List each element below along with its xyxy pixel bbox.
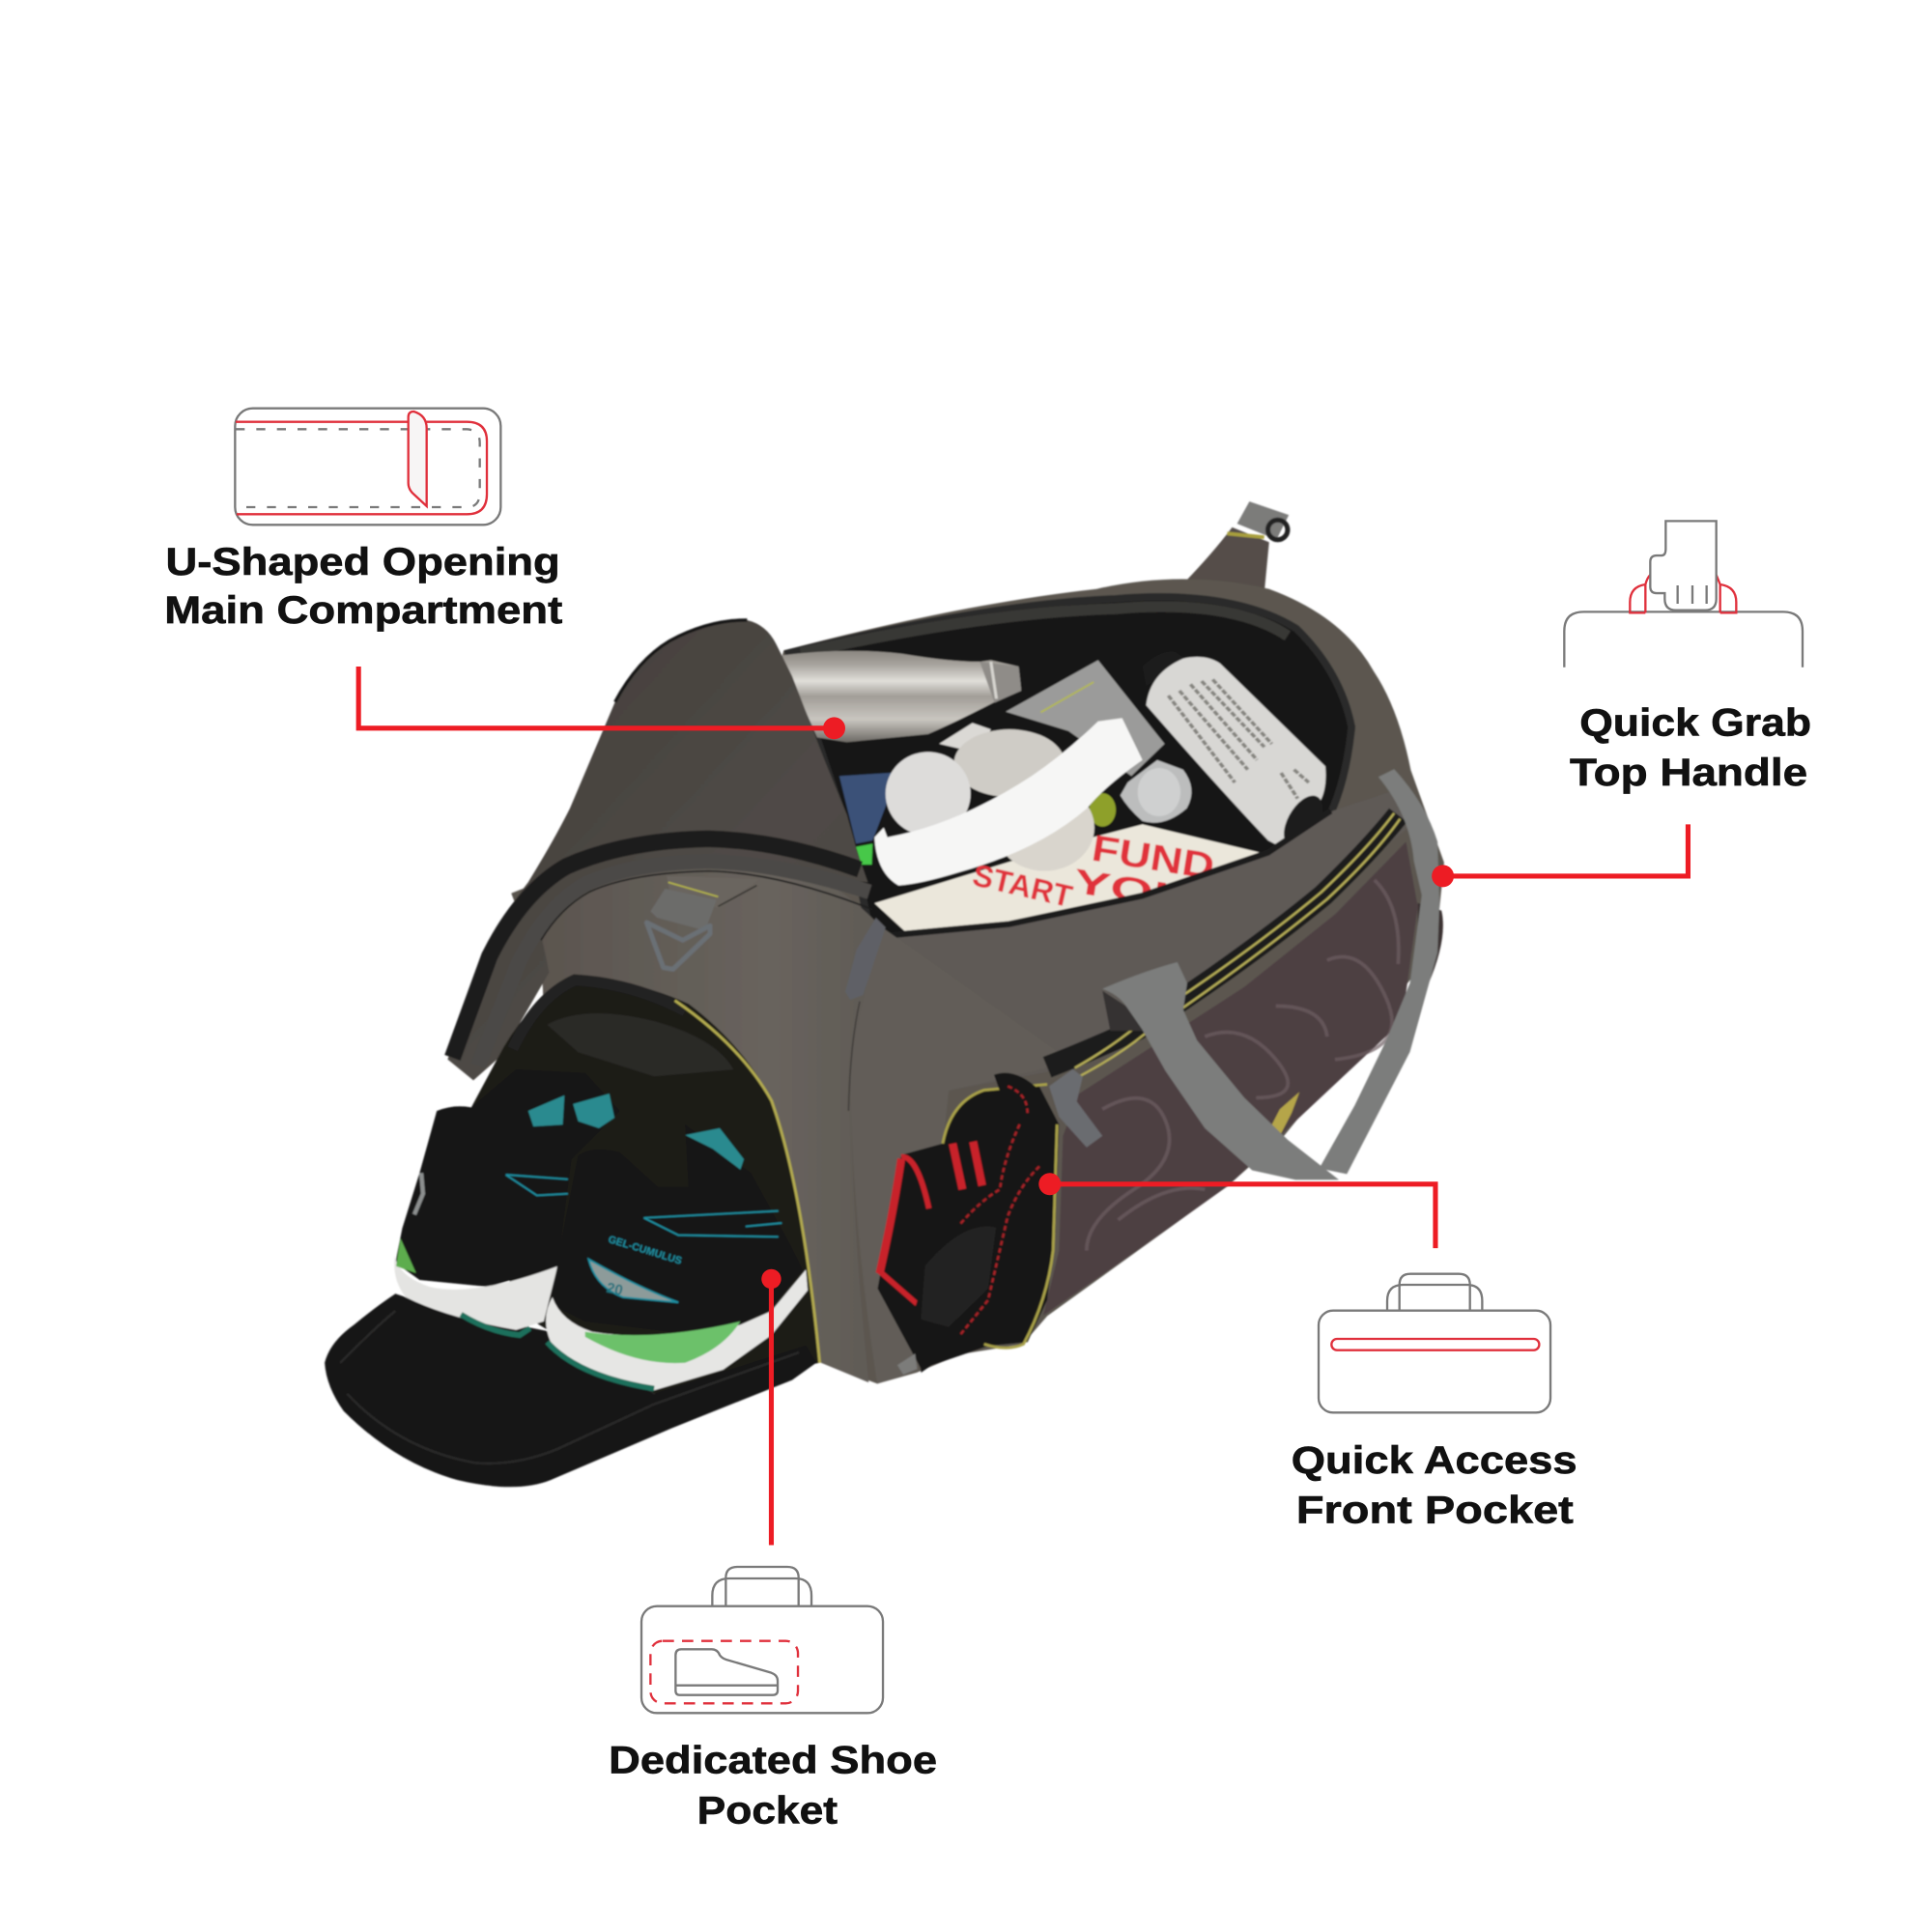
pocket piping <box>513 980 685 1049</box>
pocket folds <box>547 1013 733 1076</box>
callout: shoe pocket leader <box>761 1269 781 1545</box>
pocket stitching <box>943 1085 1057 1348</box>
heading: U-shaped opening: Main Compartment <box>164 589 562 632</box>
front pocket opening <box>878 1086 1059 1369</box>
left shoe <box>394 1069 619 1335</box>
shoe pocket interior <box>471 977 820 1394</box>
heading: front pocket: Front Pocket <box>1296 1490 1574 1532</box>
heading: shoe pocket <box>609 1739 937 1833</box>
grey product box <box>1006 660 1165 776</box>
shoe model label: GEL-CUMULUS <box>607 1234 683 1267</box>
book title: YOUR <box>1070 862 1236 924</box>
callout: main compartment leader <box>358 667 845 739</box>
duffel bag illustration <box>325 501 1444 1487</box>
icon: shoe pocket <box>641 1567 883 1713</box>
flap and side details <box>447 620 886 1111</box>
interior lining <box>801 607 1288 653</box>
shoe number: 20 <box>605 1280 624 1299</box>
icon: front pocket <box>1319 1274 1550 1412</box>
steel bottle <box>782 651 1021 742</box>
right handle strand <box>1320 769 1439 1174</box>
white headphones <box>874 718 1143 886</box>
heading: shoe pocket: Pocket <box>697 1790 838 1833</box>
pocket gear: glove <box>915 1073 1055 1373</box>
pocket gear: red strap <box>878 1142 986 1304</box>
pocket zipper stitching <box>675 1001 820 1363</box>
book title: START <box>970 858 1076 914</box>
flap edge <box>615 620 747 702</box>
heading: top handle: Top Handle <box>1570 752 1807 794</box>
flap <box>447 620 867 1080</box>
spray can <box>1143 652 1330 852</box>
door seam <box>340 1311 799 1463</box>
heading: top handle: Quick Grab <box>1579 702 1811 745</box>
top carry tab and clip <box>1185 501 1289 594</box>
heading: U-shaped opening: U-Shaped Opening <box>166 541 560 583</box>
front zip pull <box>1049 1069 1102 1148</box>
left handle strand <box>1102 962 1339 1179</box>
icon: top handle <box>1564 521 1803 668</box>
heading: front pocket: Quick Access <box>1292 1439 1577 1482</box>
bright green trim <box>856 843 872 865</box>
D-ring and strap <box>646 876 760 969</box>
heading: top handle <box>1570 702 1811 794</box>
main compartment interior <box>788 597 1351 943</box>
front rim <box>863 788 1410 1091</box>
main zipper band <box>1047 813 1400 1077</box>
end panel <box>511 850 881 1382</box>
right end panel <box>1418 903 1443 1006</box>
heading: front pocket <box>1292 1439 1577 1532</box>
side seam <box>848 1002 860 1111</box>
green cloth <box>1090 793 1116 827</box>
bag body base <box>511 579 1444 1383</box>
folded pocket door <box>325 1293 816 1487</box>
interior contents <box>782 651 1330 932</box>
heading: U-shaped opening <box>164 541 562 632</box>
small cylinder <box>1121 760 1191 823</box>
callout: top handle leader <box>1432 824 1688 887</box>
book title: FUND <box>1089 828 1217 888</box>
side zip pull <box>845 918 886 1000</box>
icon: U-shaped opening <box>235 409 500 525</box>
flap zipper band <box>452 838 872 1065</box>
navy clothes <box>839 773 895 843</box>
book title <box>970 828 1236 924</box>
right shoe <box>546 1124 808 1390</box>
bottom buckle <box>897 1353 917 1375</box>
marble front panel <box>1043 841 1418 1316</box>
handle loop shadow <box>1102 991 1144 1031</box>
book <box>874 824 1270 932</box>
front side: marble panel, zipper, pocket and handles <box>878 769 1443 1375</box>
heading: shoe pocket: Dedicated Shoe <box>609 1739 937 1781</box>
bag logo <box>1268 1092 1299 1136</box>
front centre panel <box>850 926 1072 1383</box>
main zipper edge <box>877 810 1331 936</box>
callout: front pocket leader <box>1038 1173 1435 1248</box>
shoe compartment <box>325 977 820 1487</box>
